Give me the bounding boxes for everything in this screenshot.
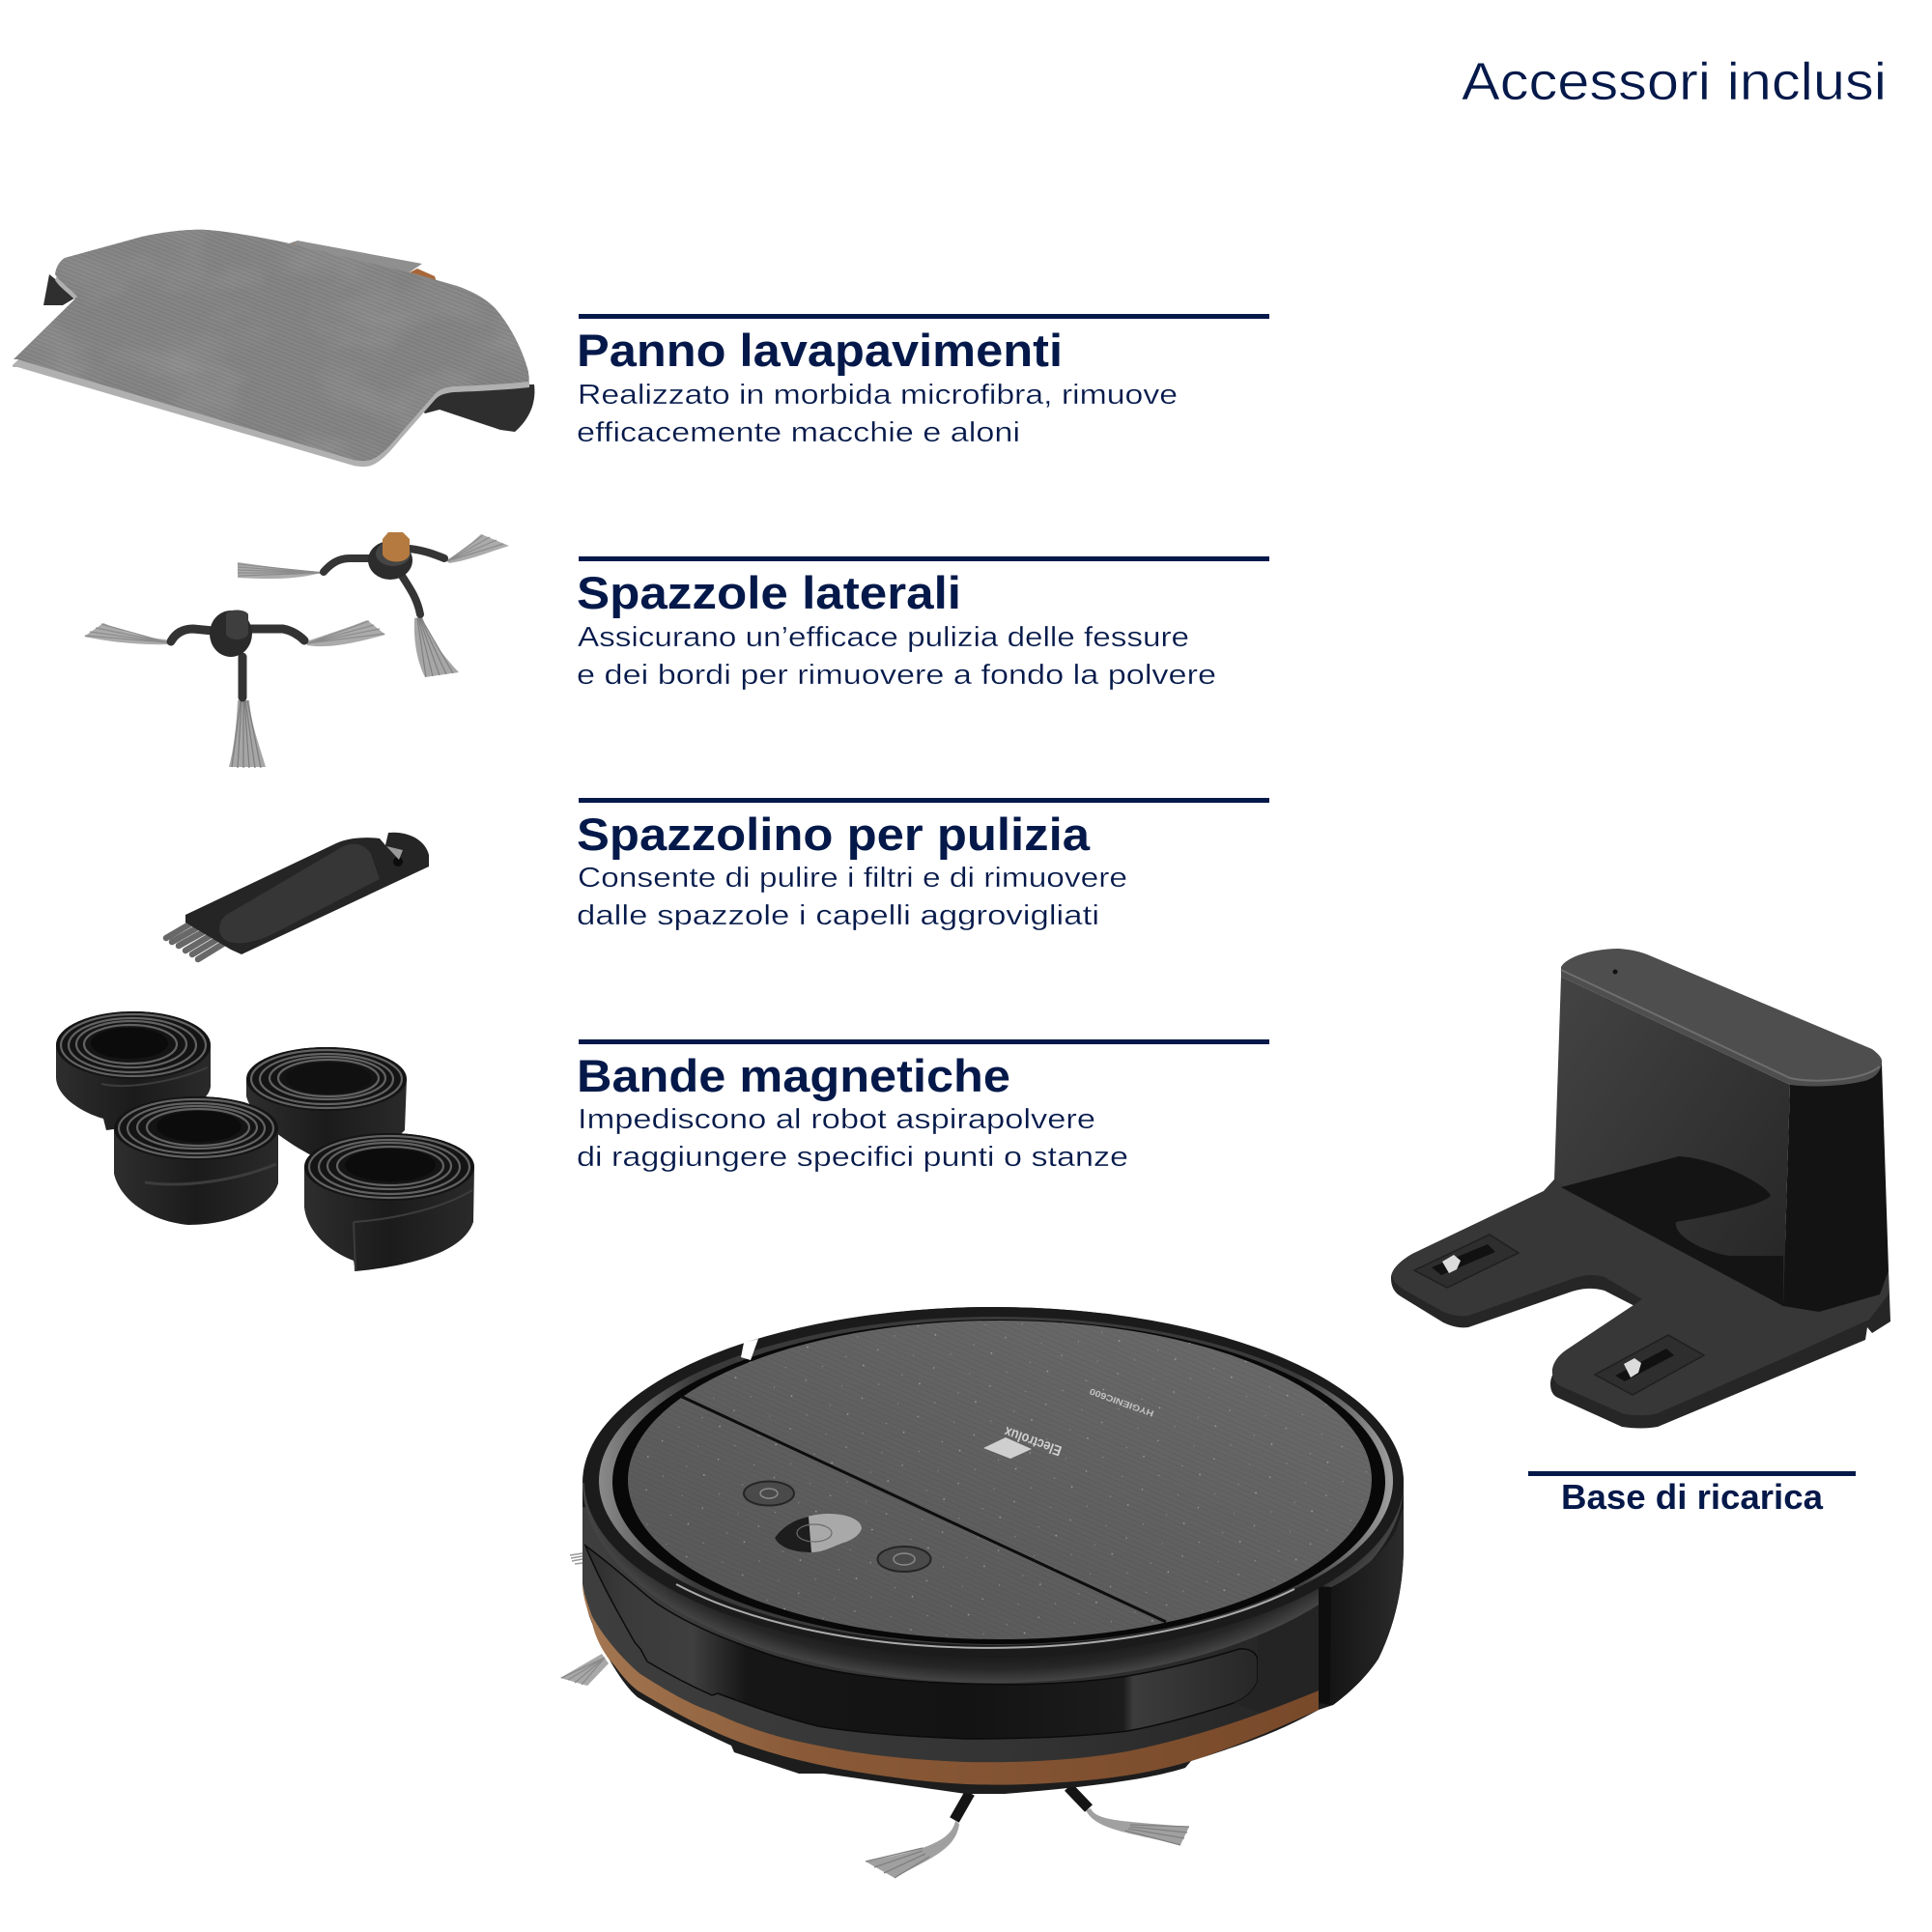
description (577, 380, 1178, 448)
icon: side brush with copper hub (238, 532, 509, 677)
base plate underside (1391, 1179, 1890, 1428)
tower front (1554, 977, 1790, 1306)
description: Assicurano un’efficace pulizia delle fessure (578, 622, 1189, 653)
heading: Spazzole laterali (577, 567, 961, 618)
arms (171, 629, 304, 697)
logo (983, 1386, 1155, 1459)
text block: Panno lavapavimenti (577, 314, 1269, 448)
bristles right (446, 534, 509, 563)
copper peg (383, 532, 410, 562)
lens (775, 1514, 862, 1552)
logo: HYGIENIC600 (1088, 1386, 1155, 1419)
heading: Spazzolino per pulizia (577, 809, 1091, 860)
robot brushes (560, 1553, 1189, 1878)
power button (877, 1547, 931, 1572)
roll 2 (246, 1047, 407, 1159)
description: Realizzato in morbida microfibra, rimuove (578, 380, 1178, 411)
icon: magnetic strip rolls (56, 1011, 474, 1271)
body silhouette (582, 1307, 1404, 1794)
icon: robot vacuum (560, 1307, 1404, 1878)
handle (185, 833, 429, 954)
bristles bottom (414, 616, 459, 677)
base plate top (1392, 1179, 1889, 1415)
top rim (584, 1307, 1404, 1657)
bristles bottom (229, 700, 266, 768)
description (577, 1104, 1128, 1173)
bristles left (238, 562, 324, 579)
tower right side (1783, 1064, 1889, 1312)
text block: Bande magnetiche (577, 1039, 1269, 1173)
description (577, 863, 1127, 931)
glossy bumper window (585, 1546, 1258, 1739)
floor reflection (1561, 1156, 1783, 1306)
arms (324, 549, 444, 614)
lower rim band (582, 1483, 1404, 1683)
description: efficacemente macchie e aloni (577, 417, 1020, 448)
title: Accessori inclusi (1462, 51, 1887, 111)
hub (368, 541, 412, 580)
description (577, 622, 1216, 691)
caption: Base di ricarica (1528, 1471, 1856, 1517)
text block: Spazzole laterali (577, 556, 1269, 691)
icon: mop pad (13, 230, 534, 467)
right body segment (1330, 1507, 1404, 1705)
icon: cleaning brush tool (166, 833, 429, 959)
bristles (166, 924, 223, 959)
caption: Base di ricarica: Base di ricarica (1561, 1477, 1824, 1517)
tower top (1561, 949, 1882, 1086)
recess (219, 844, 380, 943)
left contact (1414, 1235, 1519, 1288)
roll 4 (304, 1133, 474, 1271)
text block: Spazzolino per pulizia (577, 798, 1269, 931)
heading: Bande magnetiche (577, 1050, 1010, 1101)
bristles right (306, 620, 385, 646)
bristles left (84, 623, 168, 644)
home button (744, 1482, 794, 1505)
lid (628, 1321, 1372, 1639)
groove (612, 1320, 1385, 1644)
hub (210, 611, 252, 657)
copper band (582, 1584, 1319, 1785)
description: e dei bordi per rimuovere a fondo la polvere (577, 660, 1216, 691)
heading: Panno lavapavimenti (577, 325, 1063, 376)
description: di raggiungere specifici punti o stanze (577, 1142, 1128, 1173)
lower grey band (582, 1507, 1319, 1762)
logo: Electrolux (1002, 1423, 1064, 1459)
description: Consente di pulire i filtri e di rimuovere (578, 863, 1127, 894)
lid seam (680, 1396, 1166, 1622)
icon: side brush with dark hub (84, 611, 385, 768)
icon: charging dock (1391, 949, 1890, 1428)
description: dalle spazzole i capelli aggrovigliati (577, 900, 1099, 931)
white notch (741, 1339, 758, 1360)
description: Impediscono al robot aspirapolvere (578, 1104, 1095, 1135)
roll 3 (114, 1096, 278, 1225)
right contact (1595, 1335, 1704, 1395)
right bumper block (1234, 1584, 1319, 1713)
roll 1 (56, 1011, 211, 1130)
